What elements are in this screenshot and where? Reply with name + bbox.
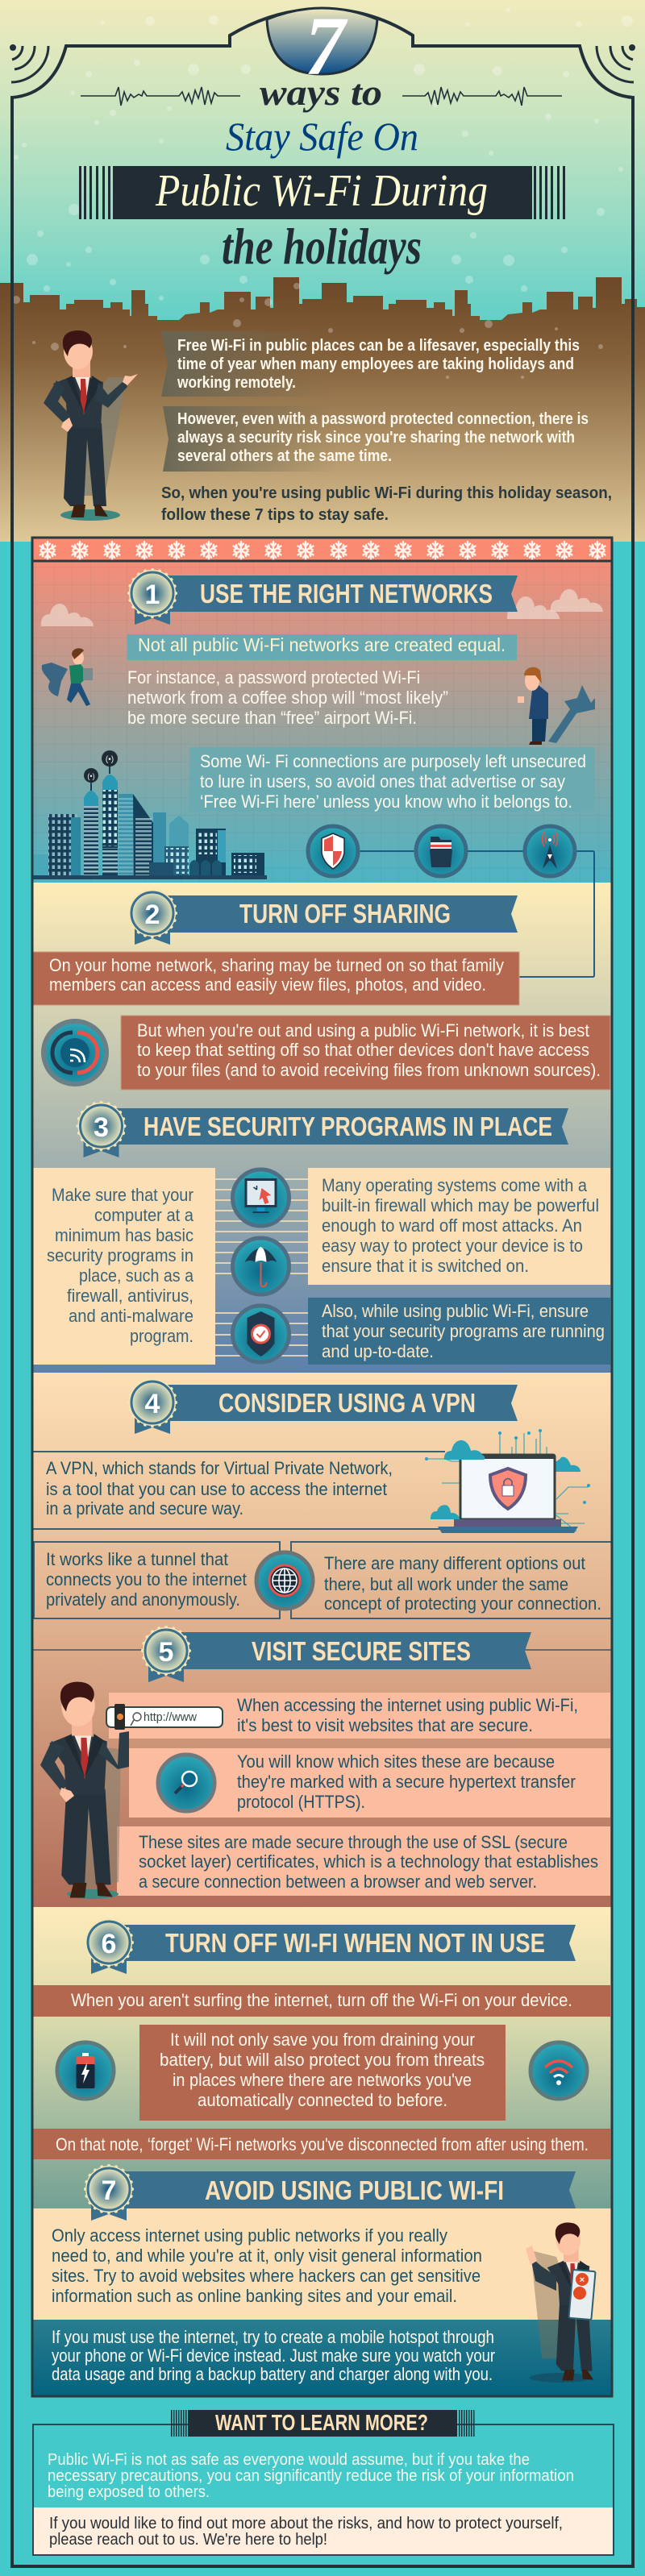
illustration: laptop with shield xyxy=(425,1429,590,1533)
section 1 heading: USE THE RIGHT NETWORKS xyxy=(200,579,493,609)
section 7 text 1: Only access internet using public networks if you really xyxy=(52,2225,447,2246)
section 4 text 1: in a private and secure way. xyxy=(46,1498,243,1519)
closing text xyxy=(48,2451,574,2501)
section 6 center box: battery, but will also protect you from threats xyxy=(160,2050,485,2070)
icon: wi-fi arcs right xyxy=(597,45,634,82)
section 6 bar 2 xyxy=(32,2129,610,2159)
section 1 text: be more secure than “free” airport Wi-Fi. xyxy=(127,708,417,728)
closing panel outline xyxy=(33,2424,614,2555)
section 3 left text: Make sure that your xyxy=(52,1185,194,1205)
icon: folder xyxy=(416,826,466,876)
section 7 text 1 xyxy=(52,2225,482,2306)
clouds xyxy=(41,589,603,626)
illustration: city skyline: (•) xyxy=(106,755,114,764)
section 6 bar 1 xyxy=(32,1985,610,2017)
section 5 text 3: a secure connection between a browser and web server. xyxy=(139,1872,537,1892)
panel: sections 6 background xyxy=(32,1907,612,2208)
icon: wi-fi xyxy=(531,2042,587,2099)
section 5 text 2 xyxy=(129,1748,610,1818)
title line 4: the holidays xyxy=(222,218,422,275)
callout: not all networks: Not all public Wi-Fi networks are created equal. xyxy=(138,634,506,655)
section 4 text box left: privately and anonymously. xyxy=(46,1589,240,1610)
intro text block 2: several others at the same time. xyxy=(177,447,392,465)
illustration: city skyline: (•) xyxy=(87,772,95,780)
closing text: being exposed to others. xyxy=(48,2483,210,2501)
stripes behind icons xyxy=(215,1179,308,1356)
section 2 heading xyxy=(129,890,518,945)
section 7 text 1: need to, and while you're at it, only visit general information xyxy=(52,2246,482,2266)
section 7 text 2: data usage and bring a backup battery and charger along with you. xyxy=(52,2364,493,2384)
section 4 text 1: is a tool that you can use to access the internet xyxy=(46,1479,387,1499)
section 6 center box xyxy=(139,2025,506,2121)
section 4 text box right: there, but all work under the same xyxy=(324,1574,568,1594)
panel: snowflake band xyxy=(32,538,612,561)
section 2 text box 1 xyxy=(32,952,519,1005)
section 1 text: For instance, a password protected Wi-Fi xyxy=(127,667,420,688)
section 7 heading xyxy=(85,2166,576,2221)
closing heading: WANT TO LEARN MORE? xyxy=(215,2410,428,2435)
pulse line right xyxy=(402,87,562,106)
skyline silhouette and lower header xyxy=(0,277,645,542)
section 5 divider lines xyxy=(32,1649,612,1651)
section 3 left text: minimum has basic xyxy=(55,1225,194,1245)
icon: shield xyxy=(308,826,358,876)
intro closing text: So, when you're using public Wi-Fi during this holiday season, xyxy=(161,484,612,502)
intro closing text xyxy=(161,484,612,524)
section 5 text 3: socket layer) certificates, which is a technology that establishes xyxy=(139,1851,598,1872)
section 5 text 2: You will know which sites these are because xyxy=(237,1751,555,1772)
section 4 text box right: concept of protecting your connection. xyxy=(324,1593,601,1614)
icon: battery xyxy=(57,2042,114,2099)
header sky background xyxy=(0,0,645,379)
section 2 text box 2: to your files (and to avoid receiving files from unknown sources). xyxy=(137,1060,601,1080)
section 1 text xyxy=(127,667,448,728)
section 3 right text 2: that your security programs are running xyxy=(322,1321,605,1341)
section 5 text 2: they're marked with a secure hypertext transfer xyxy=(237,1772,576,1792)
intro text block 1: working remotely. xyxy=(177,374,296,392)
search bar: http://www xyxy=(144,1710,197,1724)
character: businessman with tablet: × xyxy=(580,2275,585,2285)
section 7 text 2 xyxy=(52,2327,495,2384)
closing text: necessary precautions, you can significantly reduce the risk of your information xyxy=(48,2467,574,2485)
contact box: please reach out to us. We're here to help! xyxy=(49,2531,327,2549)
section 2 heading: TURN OFF SHARING xyxy=(239,899,451,929)
section 7 heading: AVOID USING PUBLIC WI-FI xyxy=(205,2175,504,2205)
icon: globe xyxy=(256,1552,313,1609)
section 2 heading: 2 xyxy=(145,900,160,930)
section 6 bar 1: When you aren't surfing the internet, turn off the Wi-Fi on your device. xyxy=(71,1990,572,2010)
section 3 right text 2 xyxy=(308,1298,610,1365)
section 6 center box: It will not only save you from draining your xyxy=(170,2030,475,2050)
section 3 right text 1: Many operating systems come with a xyxy=(322,1175,588,1195)
section 1 heading: 1 xyxy=(145,580,160,610)
section 4 text box left: connects you to the internet xyxy=(46,1569,247,1589)
section 3 left text: program. xyxy=(130,1326,194,1346)
section 1 heading xyxy=(129,570,518,625)
section 7 teal panel xyxy=(32,2320,612,2395)
section 7 cream panel xyxy=(32,2208,612,2320)
pulse line left xyxy=(81,87,240,106)
section 6 heading: TURN OFF WI-FI WHEN NOT IN USE xyxy=(165,1928,545,1958)
panel: section 1 background xyxy=(32,561,612,883)
section 2 text box 1: members can access and easily view files, photos, and video. xyxy=(49,974,486,995)
icon: sync wi-fi xyxy=(44,1021,106,1084)
title line 2: Stay Safe On xyxy=(226,114,418,159)
section 3 heading xyxy=(77,1103,568,1157)
character: man with phone xyxy=(518,667,595,745)
section 6 center box: in places where there are networks you've xyxy=(173,2070,472,2090)
section 4 text box right: There are many different options out xyxy=(324,1553,585,1573)
medallion with number 7: 7 xyxy=(305,0,348,93)
section 4 text 1: A VPN, which stands for Virtual Private Network, xyxy=(46,1458,393,1478)
section 6 heading: 6 xyxy=(102,1929,116,1959)
intro text block 2: always a security risk since you're sharing the network with xyxy=(177,429,575,447)
character: businessman with tablet xyxy=(526,2222,596,2383)
callout: unsecured connections xyxy=(189,747,595,812)
panel border xyxy=(32,538,612,2396)
medallion with number 7 xyxy=(267,0,377,93)
search bar xyxy=(106,1704,223,1730)
section 3 left text: and anti-malware xyxy=(69,1306,194,1326)
section 3 right text 1: easy way to protect your device is to xyxy=(322,1236,583,1256)
intro text block 1: Free Wi-Fi in public places can be a lifesaver, especially this xyxy=(177,337,580,355)
title band: Public Wi-Fi During xyxy=(155,166,488,216)
section 5 text 1: it's best to visit websites that are secure. xyxy=(237,1715,533,1735)
character: man with tablet xyxy=(42,648,93,706)
section 5 heading xyxy=(143,1627,531,1682)
section 4 text box right xyxy=(291,1542,612,1618)
section 3 heading: 3 xyxy=(94,1112,109,1143)
section 5 heading: 5 xyxy=(159,1637,173,1668)
connector line continued xyxy=(517,883,594,977)
snow dots xyxy=(12,7,633,379)
section 7 text 2: If you must use the internet, try to create a mobile hotspot through xyxy=(52,2327,494,2347)
panel: sections 4 and 5 background xyxy=(32,1373,612,1907)
section 5 text 1 xyxy=(109,1693,610,1739)
section 6 center box: automatically connected to before. xyxy=(198,2090,447,2110)
section 3 left text: security programs in xyxy=(47,1245,194,1265)
section 1 text: network from a coffee shop will “most likely” xyxy=(127,688,448,708)
section 2 text box 2: to keep that setting off so that other devices don't have access xyxy=(137,1040,589,1060)
section 3 right text 1: ensure that it is switched on. xyxy=(322,1256,529,1276)
intro text block 2 xyxy=(163,406,589,472)
intro text block 1 xyxy=(161,331,580,397)
panel: sections 2 and 3 background xyxy=(32,883,612,1373)
callout: unsecured connections: ‘Free Wi-Fi here’ unless you know who it belongs to. xyxy=(200,791,572,812)
character: businessman with phone xyxy=(40,1682,129,1899)
section 3 left text: firewall, antivirus, xyxy=(67,1286,194,1306)
intro text block 2: However, even with a password protected connection, there is xyxy=(177,410,589,428)
icon: umbrella xyxy=(232,1238,289,1294)
intro text block 1: time of year when many employees are taking holidays and xyxy=(177,355,574,373)
illustration: city skyline xyxy=(33,750,267,879)
section 2 text box 2: But when you're out and using a public Wi-Fi network, it is best xyxy=(137,1020,589,1041)
icon: antenna xyxy=(525,826,575,876)
contact box xyxy=(34,2507,613,2554)
icon: magnifier xyxy=(158,1755,214,1811)
section 4 heading: 4 xyxy=(145,1389,160,1419)
section 3 heading: HAVE SECURITY PROGRAMS IN PLACE xyxy=(144,1111,552,1141)
character: businessman pointing xyxy=(44,330,138,521)
section 3 left text xyxy=(32,1168,215,1365)
section 7 heading: 7 xyxy=(102,2175,116,2206)
section 3 right text 1: enough to ward off most attacks. An xyxy=(322,1215,582,1236)
section 3 right text 1 xyxy=(308,1168,610,1285)
section 3 left text: computer at a xyxy=(94,1205,194,1225)
section 7 text 1: information such as online banking sites and your email. xyxy=(52,2286,457,2306)
contact box: If you would like to find out more about the risks, and how to protect yourself, xyxy=(49,2515,563,2532)
section 5 text 2: protocol (HTTPS). xyxy=(237,1792,365,1812)
section 3 right text 1: built-in firewall which may be powerful xyxy=(322,1195,599,1215)
section 4 heading: CONSIDER USING A VPN xyxy=(218,1388,476,1418)
section 6 heading xyxy=(85,1919,576,1974)
section 4 heading xyxy=(129,1379,518,1434)
section 3 right text 2: Also, while using public Wi-Fi, ensure xyxy=(322,1301,589,1321)
section 5 heading: VISIT SECURE SITES xyxy=(252,1636,471,1666)
section 5 text 3 xyxy=(117,1826,610,1896)
icon: security badge xyxy=(232,1306,289,1362)
section 4 text 1 xyxy=(32,1452,445,1529)
connector line xyxy=(306,851,594,977)
section 3 left text: place, such as a xyxy=(79,1265,194,1286)
intro closing text: follow these 7 tips to stay safe. xyxy=(161,506,389,524)
section 2 text box 1: On your home network, sharing may be turned on so that family xyxy=(49,955,504,975)
title line 1: ways to xyxy=(260,72,382,113)
callout: unsecured connections: to lure in users, so avoid ones that advertise or say xyxy=(200,771,565,791)
section 7 text 2: your phone or Wi-Fi device instead. Just make sure you watch your xyxy=(52,2345,495,2366)
section 3 right text 2: and up-to-date. xyxy=(322,1341,434,1361)
icon: wi-fi arcs left xyxy=(11,45,48,82)
section 4 text box left: It works like a tunnel that xyxy=(46,1549,228,1569)
icon: monitor xyxy=(232,1170,289,1226)
section 4 text box left xyxy=(34,1542,280,1618)
closing text: Public Wi-Fi is not as safe as everyone would assume, but if you take the xyxy=(48,2451,530,2469)
callout: unsecured connections: Some Wi- Fi connections are purposely left unsecured xyxy=(200,751,586,771)
section 5 text 3: These sites are made secure through the use of SSL (secure xyxy=(139,1832,568,1852)
section 5 text 1: When accessing the internet using public Wi-Fi, xyxy=(237,1695,578,1715)
section 7 text 1: sites. Try to avoid websites where hackers can get sensitive xyxy=(52,2266,481,2286)
section 2 text box 2 xyxy=(121,1016,610,1090)
